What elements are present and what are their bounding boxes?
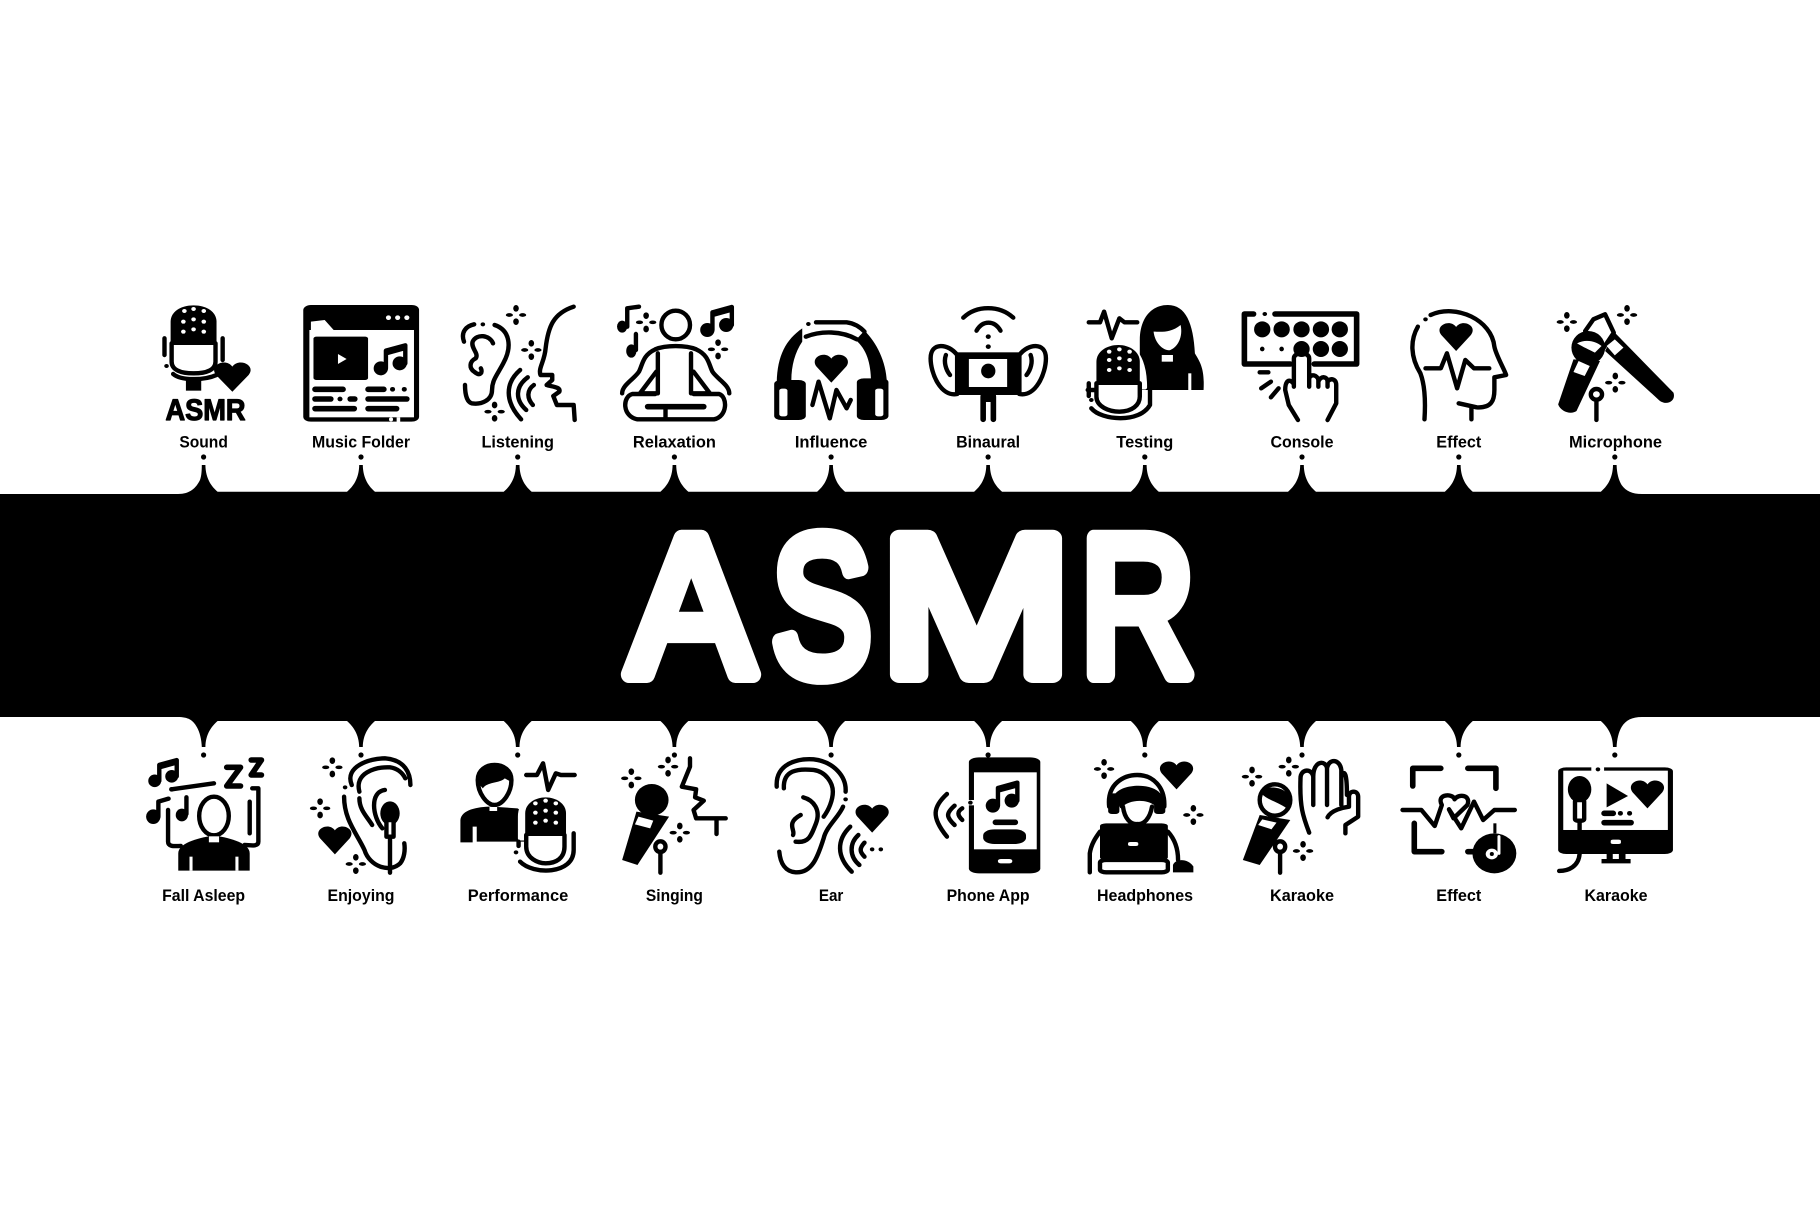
icon: influence headphones <box>774 322 888 420</box>
labels bottom row: Enjoying <box>328 887 394 905</box>
icon: binaural <box>931 308 1046 419</box>
labels top row: Microphone <box>1569 434 1662 452</box>
labels bottom row <box>162 887 1648 905</box>
black central band with connector tabs <box>0 454 1820 758</box>
labels top row <box>179 434 1662 452</box>
icon: listening <box>463 305 575 422</box>
icon: headphones <box>1090 759 1204 872</box>
labels top row: Music Folder <box>312 434 411 452</box>
labels bottom row: Ear <box>819 887 844 905</box>
icon: singing <box>621 757 726 873</box>
labels bottom row: Effect <box>1436 887 1482 905</box>
icon: fall asleep <box>146 760 261 871</box>
title: S <box>772 496 871 716</box>
icon: testing <box>1088 305 1204 418</box>
title: M <box>881 496 1071 716</box>
icon: enjoying <box>310 757 410 874</box>
icon: karaoke monitor <box>1558 767 1673 871</box>
icon: effect head <box>1412 311 1506 419</box>
title: A <box>628 496 754 716</box>
labels top row: Effect <box>1436 434 1482 452</box>
labels top row: Relaxation <box>633 434 716 452</box>
labels bottom row: Headphones <box>1097 887 1193 905</box>
labels bottom row: Karaoke <box>1270 887 1334 905</box>
icon: effect heart scan <box>1403 768 1516 873</box>
icon: ear <box>777 759 889 872</box>
labels top row: Influence <box>795 434 867 452</box>
icon: relaxation <box>617 307 733 419</box>
labels top row: Listening <box>481 434 554 452</box>
labels bottom row: Karaoke <box>1584 887 1648 905</box>
labels top row: Binaural <box>956 434 1020 452</box>
labels top row: Sound <box>179 434 228 452</box>
labels top row: Console <box>1270 434 1334 452</box>
icon: microphone <box>1557 305 1674 420</box>
icon: karaoke hand <box>1242 757 1358 873</box>
labels top row: Testing <box>1116 434 1173 452</box>
icon: sound <box>164 305 251 427</box>
icon: phone app <box>936 757 1040 873</box>
icon: performance <box>460 763 575 871</box>
icon: console <box>1244 312 1357 420</box>
labels bottom row: Singing <box>646 887 703 905</box>
labels bottom row: Performance <box>468 887 568 905</box>
title: R <box>1080 496 1195 716</box>
icon: sound: ASMR <box>166 394 246 427</box>
icon: music folder <box>303 305 419 422</box>
labels bottom row: Phone App <box>947 887 1030 905</box>
labels bottom row: Fall Asleep <box>162 887 245 905</box>
